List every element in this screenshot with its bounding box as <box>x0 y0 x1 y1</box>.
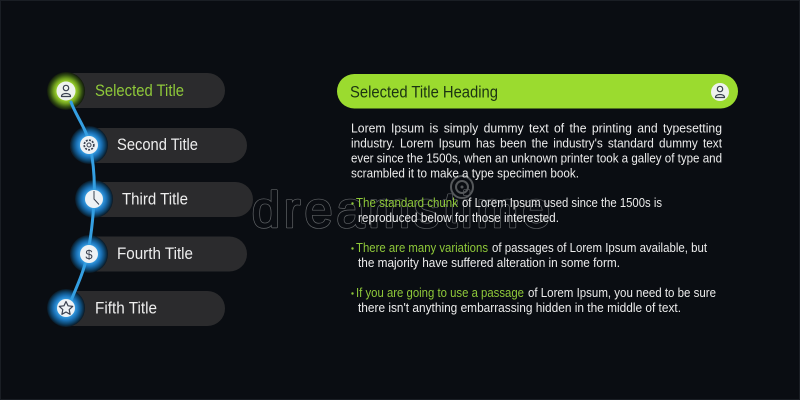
bullet: standard chunk: The standard chunk <box>356 196 459 210</box>
pill: fourth title <box>70 236 247 272</box>
icon: clock <box>85 190 103 208</box>
intro paragraph: industry. Lorem Ipsum has been the industry's standard dummy text <box>351 136 722 150</box>
heading bar <box>337 74 738 108</box>
bullet: many variations <box>351 241 707 270</box>
icon: star <box>57 299 75 317</box>
pill: selected title <box>48 73 225 108</box>
bullet: use a passage: If you are going to use a passage <box>356 286 524 300</box>
intro paragraph: ever since the 1500s, when an unknown printer took a galley of type and <box>351 152 722 166</box>
watermark: dreamstime <box>252 182 550 238</box>
connector line <box>68 102 94 308</box>
timeline node glows <box>47 72 113 327</box>
bullet: use a passage <box>351 286 716 315</box>
bullet: standard chunk <box>351 196 662 225</box>
icon: dollar: $ <box>85 247 93 262</box>
intro paragraph: Lorem Ipsum is simply dummy text of the printing and typesetting <box>351 122 722 136</box>
icon: gear <box>80 136 98 154</box>
intro paragraph: scrambled it to make a type specimen book. <box>351 166 579 180</box>
bullet: many variations: There are many variations <box>356 241 488 255</box>
intro paragraph <box>351 122 722 180</box>
watermark: dreamstime <box>252 182 550 238</box>
label: fourth title: Fourth Title <box>117 245 193 263</box>
label: second title: Second Title <box>117 136 198 154</box>
label: selected title: Selected Title <box>95 82 184 100</box>
bullet: many variations: of passages of Lorem Ipsum available, but <box>492 241 707 255</box>
bullet: use a passage: of Lorem Ipsum, you need to be sure <box>528 286 716 300</box>
bullet: many variations: the majority have suffered alteration in some form. <box>358 256 620 270</box>
icon: user (heading) <box>711 83 729 101</box>
label: fifth title: Fifth Title <box>95 300 157 318</box>
icon: user (selected) <box>56 82 76 100</box>
pill: third title <box>76 182 253 217</box>
label: third title: Third Title <box>122 190 188 208</box>
icon: dollar <box>80 245 98 263</box>
pill: second title <box>70 128 247 163</box>
panel: title pills <box>48 73 253 326</box>
bullet: standard chunk: of Lorem Ipsum used since the 1500s is <box>462 196 662 210</box>
pill: fifth title <box>48 291 225 326</box>
heading text: Selected Title Heading <box>350 82 498 102</box>
bullet: standard chunk: reproduced below for those interested. <box>358 211 559 225</box>
bullet: use a passage: there isn't anything embarrassing hidden in the middle of text. <box>358 301 681 315</box>
